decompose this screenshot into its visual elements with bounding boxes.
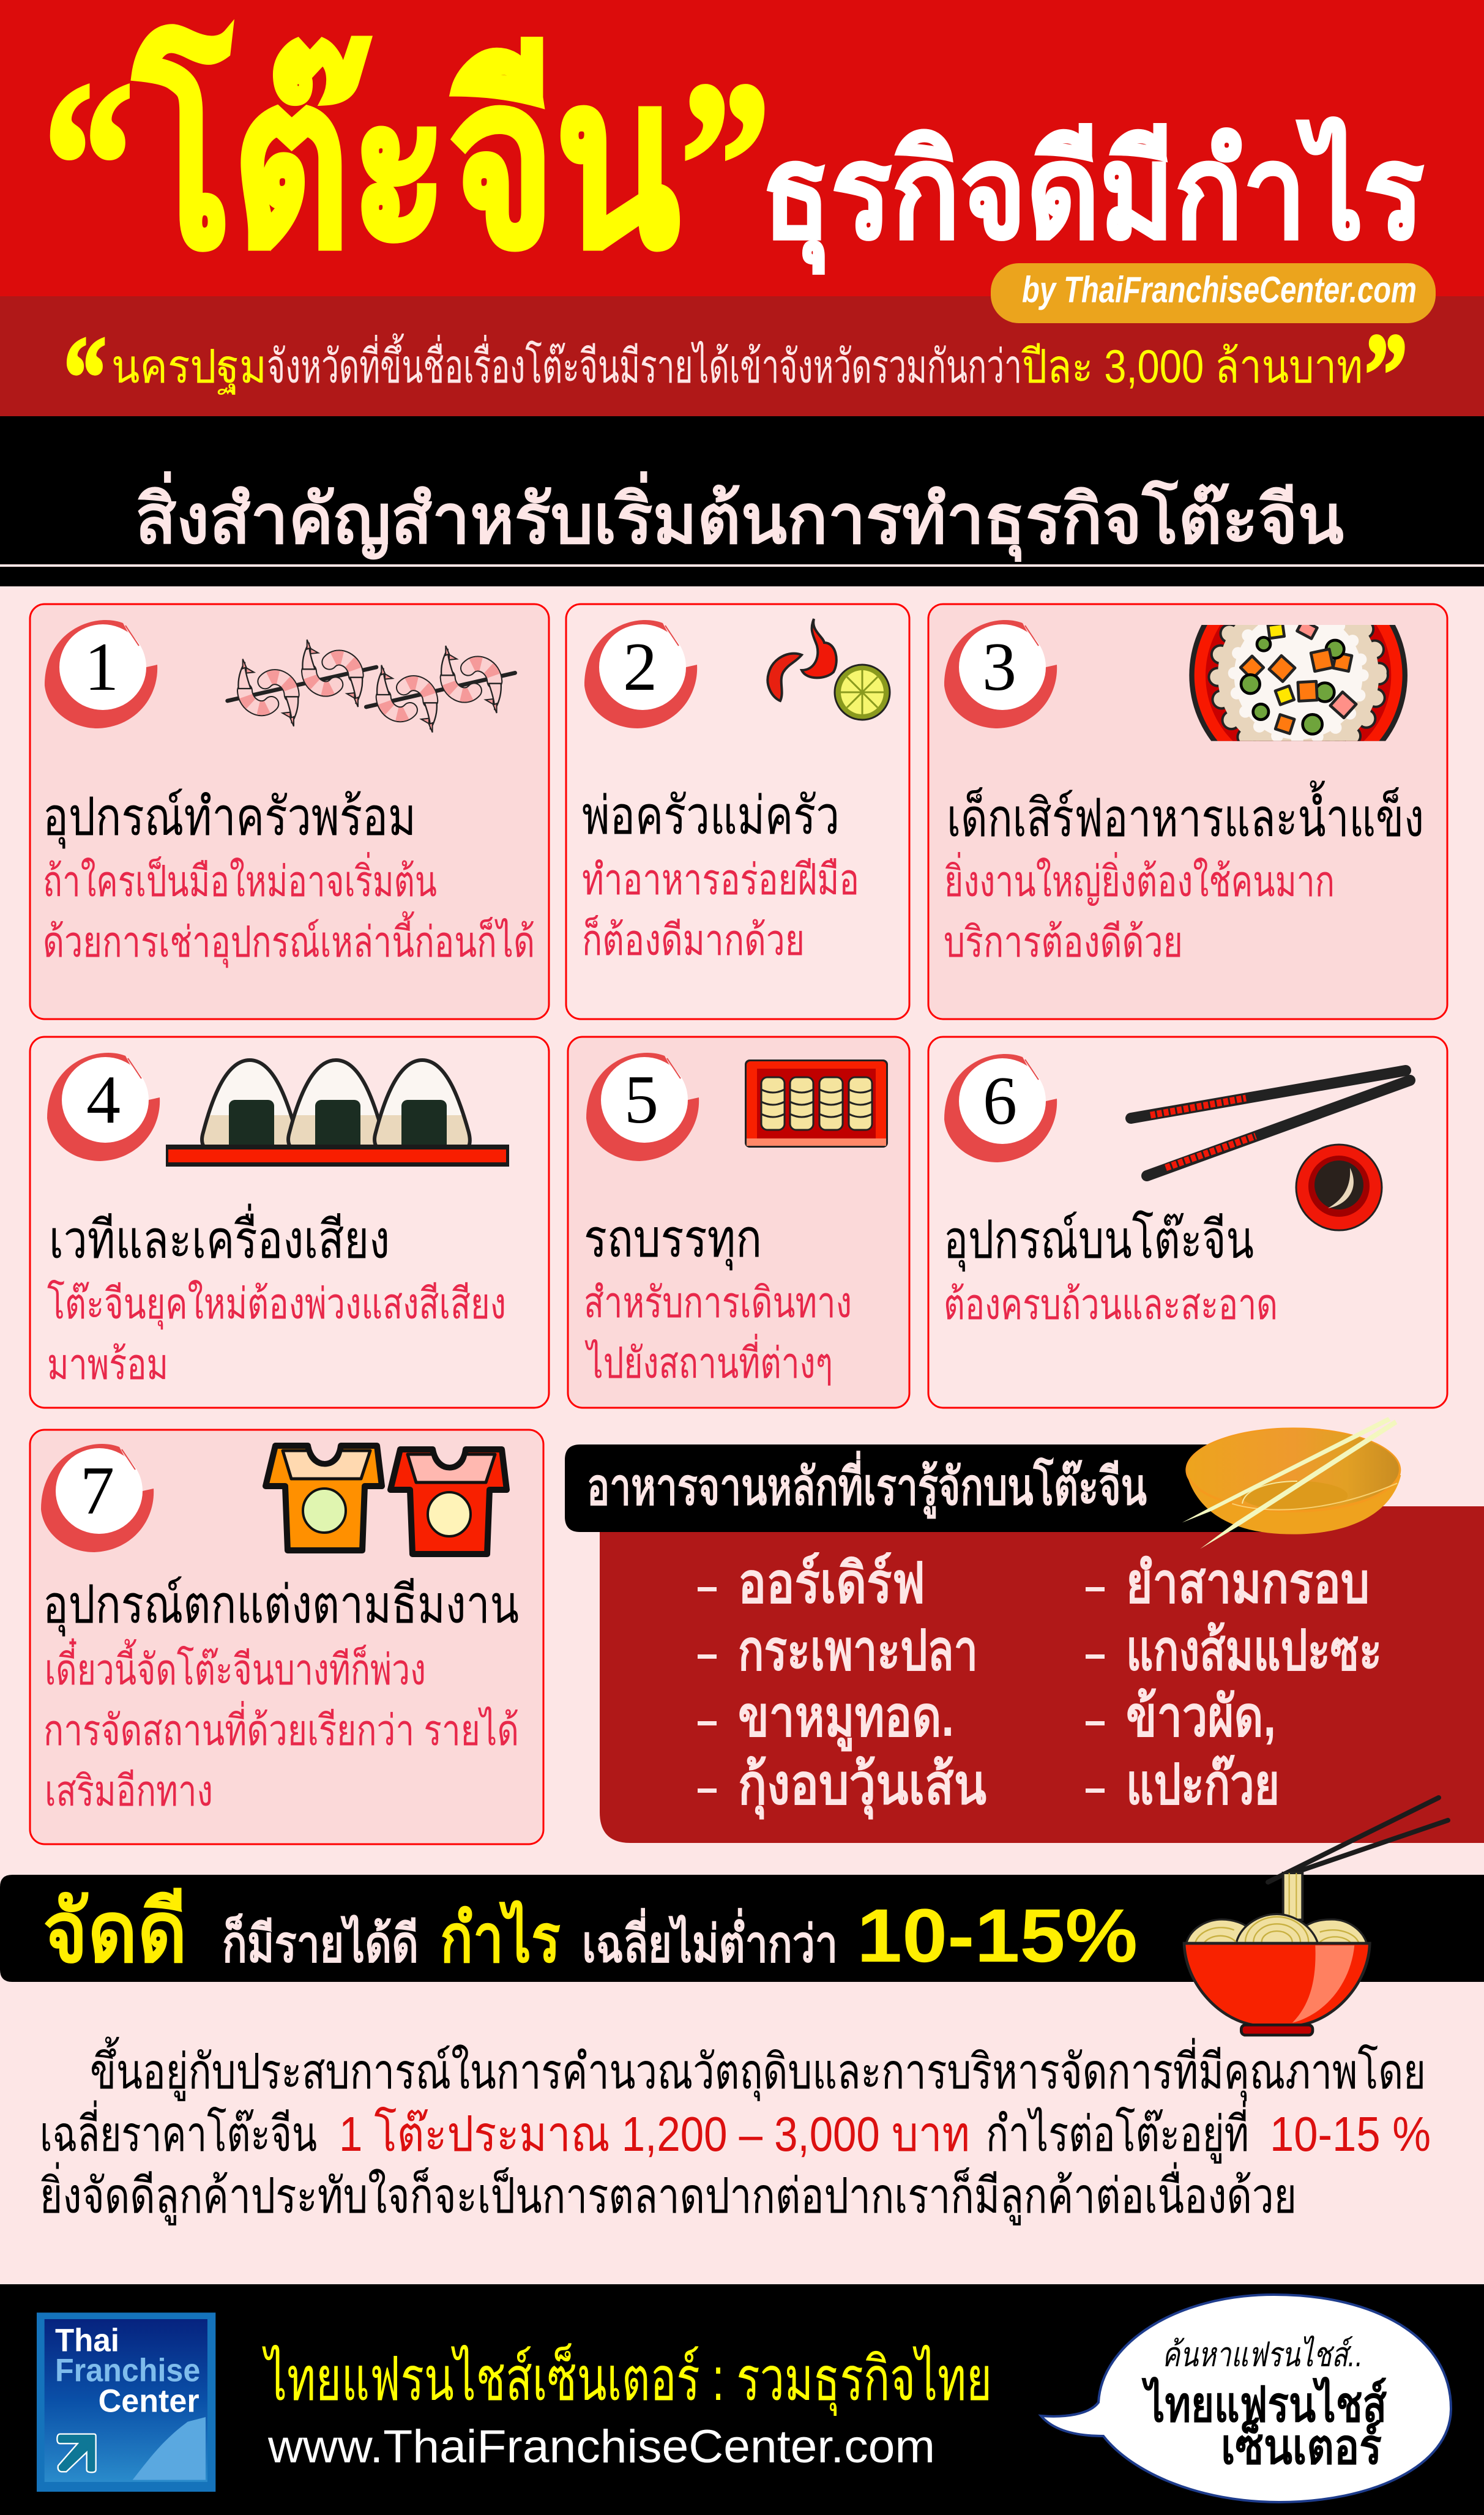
icon: chopsticks (1131, 1071, 1410, 1176)
badge 4: 4 (86, 1062, 121, 1138)
band text (43, 1884, 1138, 1980)
panel 1 (30, 604, 549, 1019)
badge 3: 3 (982, 629, 1016, 705)
dishes list column 1: กุ้งอบวุ้นเส้น (738, 1754, 986, 1820)
logo: Thai (55, 2323, 119, 2359)
footer thai text: ไทยแฟรนไชส์เซ็นเตอร์ : รวมธุรกิจไทย (262, 2342, 992, 2416)
icon: noodle bowl (1184, 1873, 1370, 2035)
badge 4 (47, 1053, 160, 1161)
quote text: นครปฐม (111, 341, 267, 395)
icon: orange bowl with chopsticks (1182, 1417, 1401, 1549)
paragraph: 10-15 % (1270, 2107, 1431, 2161)
footer url: www.ThaiFranchiseCenter.com (267, 2421, 935, 2473)
dishes list column 1: กระเพาะปลา (738, 1620, 978, 1682)
icon: theme costumes (266, 1446, 507, 1554)
panel 4 title: เวทีและเครื่องเสียง (49, 1203, 390, 1269)
bubble text: ค้นหาแฟรนไชส์.. (1162, 2335, 1363, 2374)
paragraph: เฉลี่ยราคาโต๊ะจีน (40, 2101, 317, 2161)
badge 1 (45, 620, 157, 728)
panel: main dishes (565, 1417, 1484, 1843)
panel 6 (928, 1037, 1447, 1408)
panel 1 title: อุปกรณ์ทำครัวพร้อม (43, 788, 416, 849)
dishes list column 1: ขาหมูทอด. (738, 1686, 954, 1752)
badge 7: 7 (80, 1453, 114, 1529)
badge 5: 5 (624, 1062, 658, 1138)
heading: สิ่งสำคัญสำหรับเริ่มต้นการทำธุรกิจโต๊ะจีน (135, 471, 1344, 562)
profit band (0, 1875, 1484, 1982)
panel 4 body: โต๊ะจีนยุคใหม่ต้องพ่วงแสงสีเสียง (47, 1279, 506, 1330)
panel 7 body: เดี๋ยวนี้จัดโต๊ะจีนบางทีก็พ่วง (45, 1639, 426, 1694)
dishes list column 2: ข้าวผัด, (1126, 1686, 1276, 1748)
panel 3 body: ยิ่งงานใหญ่ยิ่งต้องใช้คนมาก (944, 852, 1335, 906)
panel 7 body: เสริมอีกทาง (45, 1767, 213, 1815)
quote band (0, 263, 1484, 442)
panel 3 (928, 566, 1447, 1019)
panel 5 body: ไปยังสถานที่ต่างๆ (584, 1334, 833, 1387)
dishes heading label (565, 1444, 1303, 1532)
panel 2 body (582, 856, 859, 964)
badge 2: 2 (623, 629, 657, 705)
speech bubble (1041, 2295, 1451, 2502)
bubble text: เซ็นเตอร์ (1221, 2417, 1382, 2474)
panel 1 body: ด้วยการเช่าอุปกรณ์เหล่านี้ก่อนก็ได้ (43, 911, 535, 968)
badge 6: 6 (983, 1063, 1017, 1139)
badge 3 (944, 620, 1057, 728)
paragraph: 1 โต๊ะประมาณ 1,200 – 3,000 บาท (339, 2106, 970, 2161)
quote text: ปีละ 3,000 ล้านบาท (1021, 341, 1363, 393)
panel 7 body (43, 1639, 519, 1815)
panel 7 (30, 1430, 543, 1844)
paragraph: กำไรต่อโต๊ะอยู่ที่ (986, 2101, 1249, 2164)
byline pill (991, 263, 1436, 323)
panel 3 body: บริการต้องดีด้วย (944, 918, 1183, 966)
logo: Center (99, 2383, 199, 2420)
panel 5 title: รถบรรทุก (584, 1209, 762, 1271)
title: โต๊ะจีน: “โต๊ะจีน” (43, 21, 771, 297)
panel 2 body: ทำอาหารอร่อยฝีมือ (582, 856, 859, 903)
dishes list column 2: ยำสามกรอบ (1126, 1552, 1370, 1615)
panel 6 title: อุปกรณ์บนโต๊ะจีน (944, 1211, 1254, 1272)
icon: sushi tray (745, 1059, 888, 1148)
footer band (0, 2284, 1484, 2515)
panel 7 title: อุปกรณ์ตกแต่งตามธีมงาน (43, 1575, 519, 1637)
dishes list column 2: แกงส้มแปะซะ (1126, 1620, 1382, 1682)
opening quote: “ (64, 313, 106, 442)
quote text: จังหวัดที่ขึ้นชื่อเรื่องโต๊ะจีนมีรายได้เข้าจังหวัดรวมกันกว่า (267, 333, 1022, 393)
panel 4 body: มาพร้อม (47, 1340, 168, 1388)
dishes list column 1 (698, 1552, 986, 1820)
panel 2 body: ก็ต้องดีมากด้วย (582, 915, 805, 964)
panel 4 body (47, 1279, 506, 1388)
panel 1 body (43, 852, 535, 968)
black heading band (0, 416, 1484, 586)
badge 1: 1 (84, 629, 119, 705)
bubble text (1141, 2335, 1387, 2474)
logo (37, 2312, 215, 2492)
logo: Franchise (55, 2353, 200, 2389)
panel 5 body (584, 1279, 852, 1387)
panel 1 body: ถ้าใครเป็นมือใหม่อาจเริ่มต้น (43, 852, 437, 905)
badge 2 (584, 620, 697, 728)
panel 6 body: ต้องครบถ้วนและสะอาด (944, 1280, 1278, 1328)
bubble text: ไทยแฟรนไชส์ (1141, 2376, 1387, 2432)
icon: sauce dish (1296, 1145, 1382, 1230)
panel 2 title: พ่อครัวแม่ครัว (582, 787, 840, 845)
icon: onigiri on stage (166, 1060, 509, 1167)
band text: ก็มีรายได้ดี (222, 1913, 419, 1973)
dishes heading label: อาหารจานหลักที่เรารู้จักบนโต๊ะจีน (587, 1451, 1147, 1519)
closing quote: ” (1365, 310, 1408, 439)
band text: เฉลี่ยไม่ต่ำกว่า (582, 1908, 838, 1973)
dishes list column 1: ออร์เดิร์ฟ (738, 1552, 925, 1615)
paragraph (40, 2036, 1431, 2225)
dishes list column 2: แปะก๊วย (1126, 1754, 1280, 1816)
icon: chili and lime (767, 619, 890, 720)
icon: fried rice plate (1189, 625, 1408, 741)
panel 5 (568, 1037, 909, 1408)
band text: กำไร (440, 1900, 561, 1976)
icon: shrimp skewer (228, 640, 515, 733)
band text: 10-15% (857, 1894, 1138, 1978)
badge 6 (944, 1054, 1057, 1162)
panel 2 (566, 604, 909, 1019)
panel 4 (30, 1037, 549, 1408)
long chopsticks (1268, 1798, 1448, 1882)
badge 7 (41, 1444, 154, 1552)
badge 5 (586, 1053, 699, 1161)
panel 3 body (944, 852, 1335, 966)
panel 5 body: สำหรับการเดินทาง (584, 1279, 852, 1326)
dishes list column 2 (1086, 1552, 1382, 1816)
header band (0, 0, 1484, 297)
panel 7 body: การจัดสถานที่ด้วยเรียกว่า รายได้ (43, 1701, 519, 1754)
band text: จัดดี (43, 1884, 187, 1980)
